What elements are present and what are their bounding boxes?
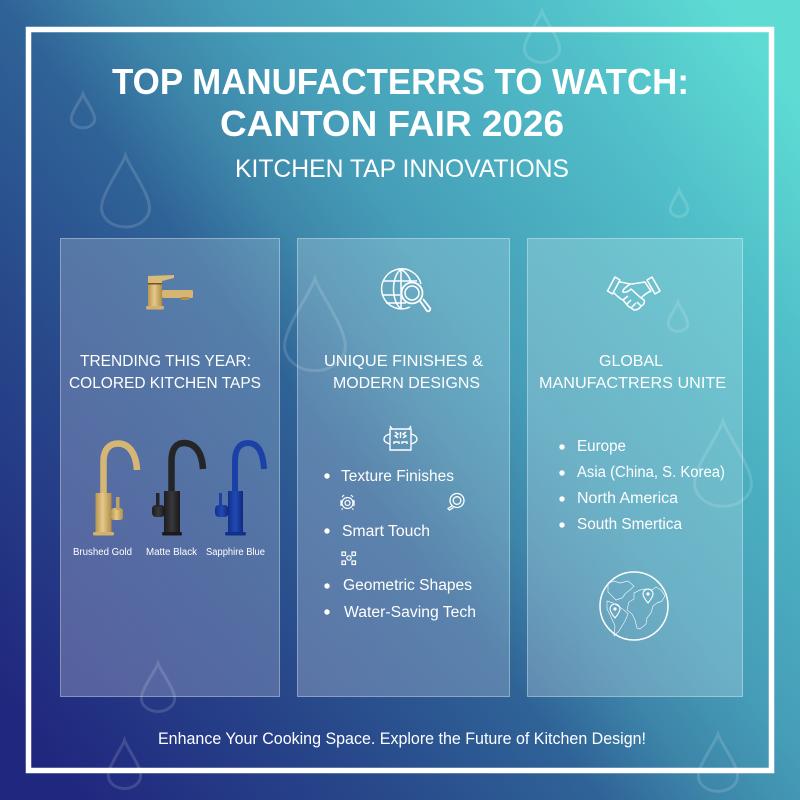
icon: geometric shapes xyxy=(342,552,356,564)
list: finishes and designs: Geometric Shapes xyxy=(343,577,472,594)
list: regions: Europe xyxy=(577,438,626,455)
panel: global manufacturers xyxy=(528,238,742,696)
panel 3 heading xyxy=(539,353,726,392)
list: regions xyxy=(559,438,725,533)
icon: globe with magnifier xyxy=(382,269,430,311)
label: brushed gold: Brushed Gold xyxy=(73,547,132,558)
panel: colored kitchen taps xyxy=(60,238,280,696)
list: finishes and designs: Texture Finishes xyxy=(341,468,454,485)
panel 1 heading: COLORED KITCHEN TAPS xyxy=(69,375,261,392)
label: sapphire blue: Sapphire Blue xyxy=(206,547,265,558)
icon: alarm clock xyxy=(341,495,354,509)
panel 1 heading xyxy=(69,353,261,392)
list: regions: Asia (China, S. Korea) xyxy=(577,464,725,481)
faucet: sapphire blue xyxy=(215,443,264,536)
panel: unique finishes xyxy=(298,238,510,696)
label: matte black: Matte Black xyxy=(146,547,198,558)
icon: handshake xyxy=(608,277,660,310)
footer tagline: Enhance Your Cooking Space. Explore the Future of Kitchen Design! xyxy=(158,730,646,748)
panel 2 background xyxy=(298,238,510,696)
icon: ring magnifier xyxy=(448,494,464,510)
title: CANTON FAIR 2026 xyxy=(220,103,564,144)
panel 3 background xyxy=(528,238,742,696)
list: regions: North America xyxy=(577,490,678,507)
panel 2 heading xyxy=(324,353,483,392)
panel 3 heading: MANUFACTRERS UNITE xyxy=(539,375,726,392)
panel 3 heading: GLOBAL xyxy=(599,353,663,370)
panel 2 heading: MODERN DESIGNS xyxy=(333,375,480,392)
panel 2 heading: UNIQUE FINISHES & xyxy=(324,353,483,370)
faucet: brushed gold xyxy=(93,444,137,536)
title: TOP MANUFACTERRS TO WATCH: xyxy=(112,61,689,102)
list: finishes and designs xyxy=(324,468,476,621)
list: finishes and designs: Water-Saving Tech xyxy=(344,604,476,621)
title xyxy=(112,61,689,144)
faucet: matte black xyxy=(152,443,203,536)
panel 1 background xyxy=(60,238,280,696)
subtitle: KITCHEN TAP INNOVATIONS xyxy=(235,155,569,183)
panel 1 heading: TRENDING THIS YEAR: xyxy=(80,353,251,370)
icon: texture finish xyxy=(384,426,417,450)
list: regions: South Smertica xyxy=(577,516,682,533)
list: finishes and designs: Smart Touch xyxy=(342,523,430,540)
icon: gold basin tap xyxy=(146,275,193,310)
icon: world globe with pins xyxy=(600,572,668,640)
